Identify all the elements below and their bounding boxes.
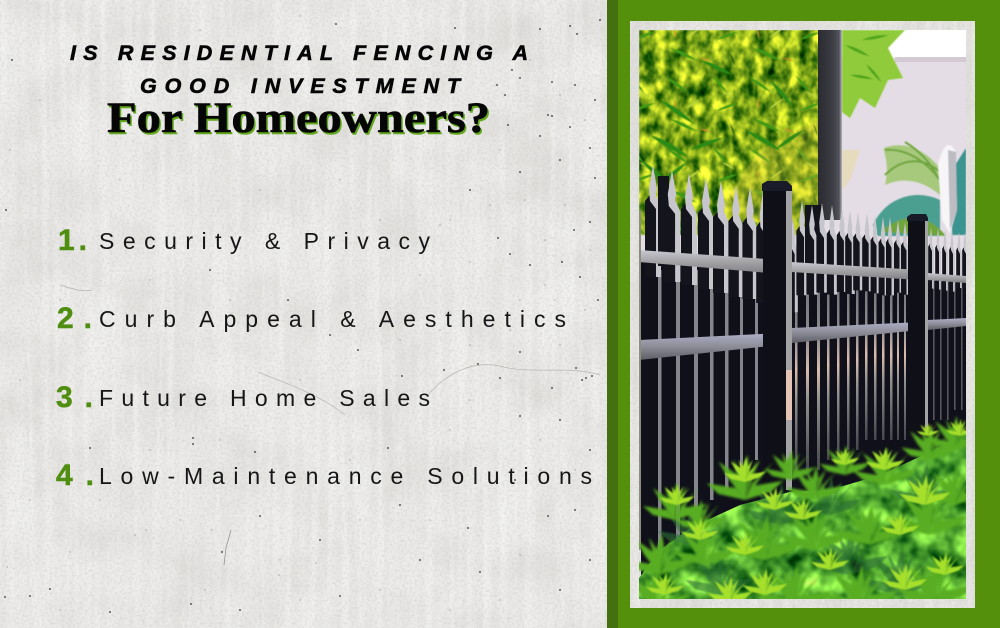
panel: green background [618,0,1000,628]
title line 3 shadow: For Homeowners? [108,97,492,144]
fence body: dark infill below top rail [641,262,966,575]
fence post 2 [907,214,928,433]
panel: dark green stripe [607,0,618,628]
title line 2: GOOD INVESTMENT [140,74,462,98]
fence lower highlights: silver pickets section 1 [658,270,758,549]
picket spears: section 2 [788,200,909,312]
item 2 label: Curb Appeal & Aesthetics [99,306,566,332]
picket spears: section 1 [645,165,770,303]
item 3 number: 3. [56,381,93,414]
picket spears: section 3 [928,227,968,292]
item 2 number: 2. [57,302,92,335]
upper rails [639,250,966,283]
shrub tufts, mid green [639,416,966,599]
lower rails [639,318,966,360]
photo: black metal fence with shrubs [639,30,966,599]
heading: title block [70,41,528,144]
photo frame: concrete border [630,21,975,608]
left picket sliver [639,210,641,550]
photo background wall [639,30,966,599]
concrete speckles [5,20,600,612]
title line 3: For Homeowners? [107,95,490,142]
panel: concrete background [0,0,607,628]
fence lower highlights: section 3 pickets [933,280,963,420]
fence lower highlights: silver pickets section 2 [795,270,906,470]
bamboo foliage [639,30,821,235]
shrub tufts, bright [646,419,974,603]
item 3 label: Future Home Sales [99,385,430,411]
item 4 number: 4. [56,459,94,492]
item 1 number: 1. [58,224,87,257]
palm behind fence [873,142,966,236]
fence post 1 [762,181,792,490]
shrub mass [639,432,966,599]
title line 1: IS RESIDENTIAL FENCING A [70,41,528,65]
foliage behind pole, right [842,30,905,190]
steel pole [818,30,842,220]
list: four benefits [56,224,592,492]
item 4 label: Low-Maintenance Solutions [99,463,592,489]
shrub tufts, dark [658,463,960,595]
item 1 label: Security & Privacy [99,228,430,254]
